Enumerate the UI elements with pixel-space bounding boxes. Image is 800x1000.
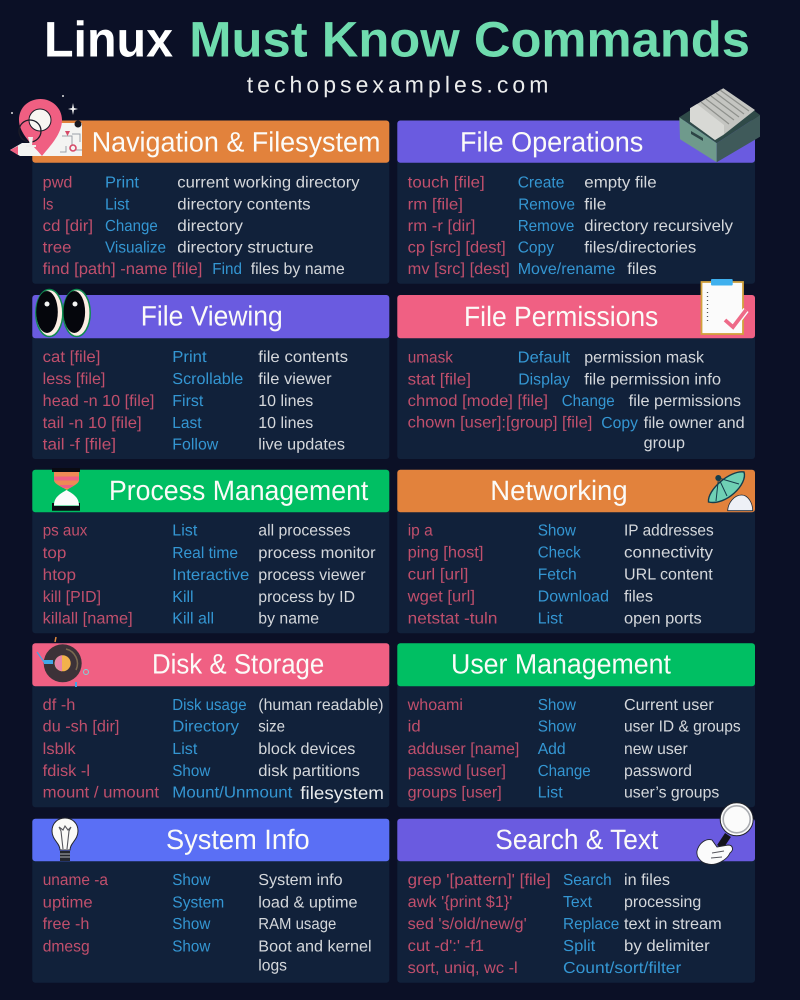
row: stat: Display bbox=[518, 372, 570, 389]
header bar bbox=[32, 819, 389, 861]
row: passwd bbox=[408, 763, 692, 780]
row: mv: files bbox=[627, 261, 657, 278]
heading: File Permissions bbox=[464, 301, 658, 332]
command table bbox=[408, 174, 733, 278]
row: killall: by name bbox=[258, 611, 319, 628]
row: ping: Check bbox=[538, 545, 582, 562]
row: ps aux: ps aux bbox=[43, 523, 87, 540]
icon: magnifying glass bbox=[697, 803, 753, 864]
panel: navigation and filesystem bbox=[10, 95, 389, 284]
icon: eyes bbox=[36, 290, 90, 336]
row: find bbox=[43, 261, 345, 278]
panel: search and text bbox=[397, 803, 755, 983]
row: uptime: load & uptime bbox=[258, 894, 358, 911]
row: df: df -h bbox=[43, 697, 75, 714]
header bar bbox=[397, 295, 755, 338]
icon: file drawer bbox=[679, 88, 760, 162]
row: dmesg: Boot and kernel bbox=[258, 938, 372, 955]
icon: light bulb bbox=[52, 818, 78, 861]
row: tail -n: Last bbox=[172, 415, 202, 432]
row: find: files by name bbox=[251, 261, 345, 278]
row: head: 10 lines bbox=[258, 393, 313, 410]
row: passwd: passwd [user] bbox=[408, 763, 506, 780]
heading: File Viewing bbox=[141, 301, 283, 332]
heading: Search & Text bbox=[495, 824, 659, 855]
row: killall: Kill all bbox=[172, 611, 214, 628]
row: dmesg: dmesg bbox=[43, 938, 90, 955]
row: free bbox=[43, 916, 336, 933]
row: mount bbox=[43, 783, 384, 803]
row: grep: in files bbox=[624, 872, 670, 889]
title: Must Know Commands bbox=[189, 12, 750, 68]
command table bbox=[43, 697, 384, 803]
row: killall: killall [name] bbox=[43, 611, 133, 628]
heading: Navigation & Filesystem bbox=[92, 127, 380, 158]
row: cd bbox=[43, 218, 243, 235]
header bar bbox=[397, 470, 755, 512]
row: groups: List bbox=[538, 785, 563, 802]
row: cp: Copy bbox=[518, 240, 554, 256]
row: killall bbox=[43, 611, 319, 628]
row: mv: Move/rename bbox=[518, 261, 615, 278]
row: adduser: new user bbox=[624, 741, 688, 758]
row: tail -n: tail -n 10 [file] bbox=[43, 415, 142, 432]
row: wget: Download bbox=[538, 589, 609, 606]
row: ip a: ip a bbox=[408, 523, 433, 540]
row: id: user ID & groups bbox=[624, 719, 741, 736]
row: ls bbox=[43, 196, 311, 214]
row: tail -f bbox=[43, 436, 345, 454]
row: uname: System info bbox=[258, 872, 343, 889]
row: pwd: Print bbox=[105, 174, 140, 192]
row: rm bbox=[408, 196, 606, 214]
icon: hourglass bbox=[52, 468, 80, 511]
row: id: Show bbox=[538, 719, 576, 736]
row: fdisk: fdisk -l bbox=[43, 763, 90, 780]
row: stat: file permission info bbox=[584, 372, 721, 389]
icon: satellite dish bbox=[708, 472, 753, 511]
row: chown: chown [user]:[group] [file] bbox=[408, 414, 592, 431]
row: tree: tree bbox=[43, 240, 71, 256]
row: cat: cat [file] bbox=[43, 349, 100, 366]
row: htop: htop bbox=[43, 567, 76, 584]
row: rm -r: Remove bbox=[518, 218, 574, 235]
row: kill: kill [PID] bbox=[43, 589, 101, 606]
icon: vinyl disk bbox=[37, 637, 88, 687]
row: cut: cut -d':' -f1 bbox=[408, 938, 484, 955]
row: sed bbox=[408, 916, 722, 933]
row: chown: Copy bbox=[601, 415, 638, 432]
row: umask: umask bbox=[408, 350, 454, 367]
row: wget: files bbox=[624, 589, 653, 606]
panel: system info bbox=[32, 818, 389, 983]
row: curl: Fetch bbox=[538, 567, 577, 584]
row: touch: touch [file] bbox=[408, 174, 485, 192]
row: less: Scrollable bbox=[172, 371, 243, 388]
row: rm: rm [file] bbox=[408, 196, 463, 214]
row: top: process monitor bbox=[258, 545, 376, 562]
row: less: file viewer bbox=[258, 371, 332, 388]
row: ping: ping [host] bbox=[408, 545, 483, 562]
row: whoami: Current user bbox=[624, 697, 714, 714]
row: chown: group bbox=[644, 435, 685, 452]
row: netstat: open ports bbox=[624, 610, 702, 628]
command table bbox=[407, 523, 714, 628]
row: groups: user’s groups bbox=[624, 785, 719, 802]
row: stat bbox=[408, 372, 721, 389]
row: sort: sort, uniq, wc -l bbox=[408, 960, 518, 977]
icon: map pin bbox=[10, 95, 82, 156]
row: grep: grep '[pattern]' [file] bbox=[408, 872, 551, 889]
row: uptime: System bbox=[172, 894, 224, 911]
row: sed: text in stream bbox=[624, 916, 722, 933]
row: umask bbox=[408, 350, 705, 367]
row: ip a: IP addresses bbox=[624, 523, 714, 540]
row: adduser: adduser [name] bbox=[408, 741, 519, 758]
row: free: free -h bbox=[43, 916, 89, 933]
row: kill: process by ID bbox=[258, 589, 355, 606]
icon: clipboard bbox=[702, 279, 746, 334]
command table bbox=[43, 174, 360, 278]
header bar bbox=[32, 470, 389, 512]
row: whoami: Show bbox=[538, 697, 576, 714]
row: groups bbox=[408, 785, 719, 802]
row: pwd: pwd bbox=[43, 174, 72, 192]
row: ls: List bbox=[105, 196, 130, 214]
row: cut bbox=[408, 938, 710, 955]
row: du: size bbox=[258, 719, 285, 736]
row: curl: curl [url] bbox=[408, 567, 468, 584]
row: free: Show bbox=[172, 916, 211, 933]
row: ps aux: all processes bbox=[258, 523, 351, 540]
row: du: Directory bbox=[172, 719, 239, 736]
row: wget: wget [url] bbox=[407, 589, 475, 606]
header bar bbox=[397, 819, 755, 861]
row: ps aux: List bbox=[172, 523, 198, 540]
row: uname: uname -a bbox=[43, 872, 108, 889]
row: less bbox=[43, 371, 332, 388]
row: chmod: file permissions bbox=[629, 393, 741, 410]
row: find: find [path] -name [file] bbox=[43, 261, 202, 278]
row: du: du -sh [dir] bbox=[43, 719, 119, 736]
row: wget bbox=[407, 589, 653, 606]
row: pwd: current working directory bbox=[177, 174, 360, 192]
row: mv: mv [src] [dest] bbox=[408, 261, 510, 278]
command table bbox=[408, 872, 722, 977]
row: curl bbox=[408, 567, 713, 584]
command table bbox=[407, 697, 741, 802]
row: cat: Print bbox=[172, 349, 207, 366]
row: cp: files/directories bbox=[584, 240, 696, 256]
row: grep: Search bbox=[563, 872, 612, 889]
subtitle: techopsexamples.com bbox=[247, 72, 548, 98]
row: touch: Create bbox=[518, 174, 564, 192]
row: stat: stat [file] bbox=[408, 372, 471, 389]
row: mount: Mount/Unmount bbox=[172, 785, 293, 802]
row: sort: Count/sort/filter bbox=[563, 960, 682, 977]
command table bbox=[408, 350, 745, 452]
title: Linux bbox=[44, 12, 173, 68]
panel: disk and storage bbox=[32, 637, 389, 807]
row: fdisk bbox=[43, 763, 360, 780]
row: chmod: Change bbox=[562, 393, 615, 410]
panel: process management bbox=[32, 468, 389, 633]
row: chmod bbox=[408, 393, 741, 410]
panel: user management bbox=[397, 643, 755, 807]
row: tail -f: tail -f [file] bbox=[43, 436, 116, 454]
row: awk: awk '{print $1}' bbox=[408, 894, 512, 911]
header bar bbox=[397, 643, 755, 686]
row: ip a bbox=[408, 523, 714, 540]
row: dmesg bbox=[43, 938, 372, 975]
row: df: (human readable) bbox=[258, 697, 384, 714]
row: free: RAM usage bbox=[258, 916, 336, 933]
command table bbox=[43, 523, 376, 628]
row: kill bbox=[43, 589, 355, 606]
command table bbox=[43, 872, 372, 975]
row: ip a: Show bbox=[538, 523, 576, 540]
header bar bbox=[32, 295, 389, 338]
row: top bbox=[43, 545, 376, 562]
row: find: Find bbox=[212, 261, 242, 278]
row: rm -r: rm -r [dir] bbox=[408, 218, 475, 235]
row: chmod: chmod [mode] [file] bbox=[408, 393, 548, 410]
row: umask: permission mask bbox=[584, 350, 705, 367]
row: touch: empty file bbox=[584, 174, 657, 192]
heading: File Operations bbox=[460, 127, 643, 158]
row: whoami: whoami bbox=[407, 697, 463, 714]
row: mv bbox=[408, 261, 657, 278]
row: kill: Kill bbox=[172, 589, 194, 606]
row: adduser: Add bbox=[538, 741, 566, 758]
row: whoami bbox=[407, 697, 714, 714]
row: less: less [file] bbox=[43, 371, 105, 388]
row: sed: Replace bbox=[563, 916, 619, 933]
row: uname: Show bbox=[172, 872, 211, 889]
row: sed: sed 's/old/new/g' bbox=[408, 916, 527, 933]
row: tree: directory structure bbox=[177, 240, 314, 256]
row: umask: Default bbox=[518, 350, 571, 367]
row: htop bbox=[43, 567, 366, 584]
header bar bbox=[32, 643, 389, 686]
row: curl: URL content bbox=[624, 567, 713, 584]
row: du bbox=[43, 719, 285, 736]
row: ping bbox=[408, 545, 713, 562]
panel: file permissions bbox=[397, 279, 755, 459]
row: cd: Change bbox=[105, 218, 158, 235]
row: uptime: uptime bbox=[43, 894, 93, 911]
row: rm: file bbox=[584, 196, 606, 214]
row: sort bbox=[408, 960, 682, 977]
row: head bbox=[43, 393, 313, 410]
row: cat: file contents bbox=[258, 349, 348, 366]
row: dmesg: logs bbox=[258, 958, 287, 975]
row: tree bbox=[43, 240, 314, 256]
row: cut: Split bbox=[563, 938, 596, 955]
row: groups: groups [user] bbox=[408, 785, 502, 802]
row: rm: Remove bbox=[518, 196, 575, 214]
row: cut: by delimiter bbox=[624, 938, 710, 955]
row: awk bbox=[408, 894, 701, 911]
row: htop: process viewer bbox=[258, 567, 366, 584]
row: ping: connectivity bbox=[624, 545, 713, 562]
heading: Disk & Storage bbox=[152, 648, 324, 679]
row: head: First bbox=[172, 393, 204, 410]
row: rm -r bbox=[408, 218, 733, 235]
row: mount: mount / umount bbox=[43, 785, 160, 802]
row: id: id bbox=[408, 719, 421, 736]
row: tail -f: live updates bbox=[258, 436, 345, 454]
row: grep bbox=[408, 872, 670, 889]
row: tail -n bbox=[43, 415, 313, 432]
row: lsblk bbox=[43, 741, 355, 758]
row: top: Real time bbox=[172, 545, 238, 562]
row: lsblk: List bbox=[172, 741, 198, 758]
row: ls: directory contents bbox=[177, 196, 311, 214]
header bar bbox=[397, 120, 755, 163]
row: cp: cp [src] [dest] bbox=[408, 240, 506, 256]
heading: System Info bbox=[166, 824, 310, 855]
row: adduser bbox=[408, 741, 688, 758]
row: netstat bbox=[408, 610, 702, 628]
row: df: Disk usage bbox=[172, 697, 247, 714]
panel: networking bbox=[397, 470, 755, 633]
row: lsblk: lsblk bbox=[43, 741, 77, 758]
row: tail -f: Follow bbox=[172, 436, 219, 454]
row: touch bbox=[408, 174, 657, 192]
row: id bbox=[408, 719, 741, 736]
panel: file viewing bbox=[32, 290, 389, 459]
heading: User Management bbox=[451, 648, 671, 680]
row: chown bbox=[408, 414, 745, 452]
row: dmesg: Show bbox=[172, 938, 211, 955]
row: uptime bbox=[43, 894, 358, 911]
row: ls: ls bbox=[43, 196, 53, 214]
heading: Networking bbox=[490, 475, 628, 506]
command table bbox=[43, 349, 348, 454]
row: fdisk: Show bbox=[172, 763, 211, 780]
row: awk: processing bbox=[624, 894, 701, 911]
row: tail -n: 10 lines bbox=[258, 415, 313, 432]
row: cd: directory bbox=[177, 218, 243, 235]
row: passwd: Change bbox=[538, 763, 591, 780]
row: mount: filesystem bbox=[300, 783, 384, 803]
row: netstat: List bbox=[538, 610, 563, 628]
row: fdisk: disk partitions bbox=[258, 763, 360, 780]
row: cat bbox=[43, 349, 348, 366]
row: htop: Interactive bbox=[172, 567, 249, 584]
row: tree: Visualize bbox=[105, 240, 166, 256]
row: lsblk: block devices bbox=[258, 741, 355, 758]
row: uname bbox=[43, 872, 343, 889]
row: ps aux bbox=[43, 523, 351, 540]
row: cd: cd [dir] bbox=[43, 218, 93, 235]
row: df bbox=[43, 697, 384, 714]
row: chown: file owner and bbox=[644, 415, 745, 432]
row: awk: Text bbox=[563, 894, 593, 911]
row: cp bbox=[408, 240, 696, 256]
row: top: top bbox=[43, 545, 66, 562]
row: netstat: netstat -tuln bbox=[408, 610, 497, 628]
panel: file operations bbox=[397, 88, 760, 284]
row: head: head -n 10 [file] bbox=[43, 393, 154, 410]
row: rm -r: directory recursively bbox=[584, 218, 733, 235]
row: pwd bbox=[43, 174, 360, 192]
heading: Process Management bbox=[109, 475, 369, 506]
row: passwd: password bbox=[624, 763, 692, 780]
header bar bbox=[32, 120, 389, 163]
